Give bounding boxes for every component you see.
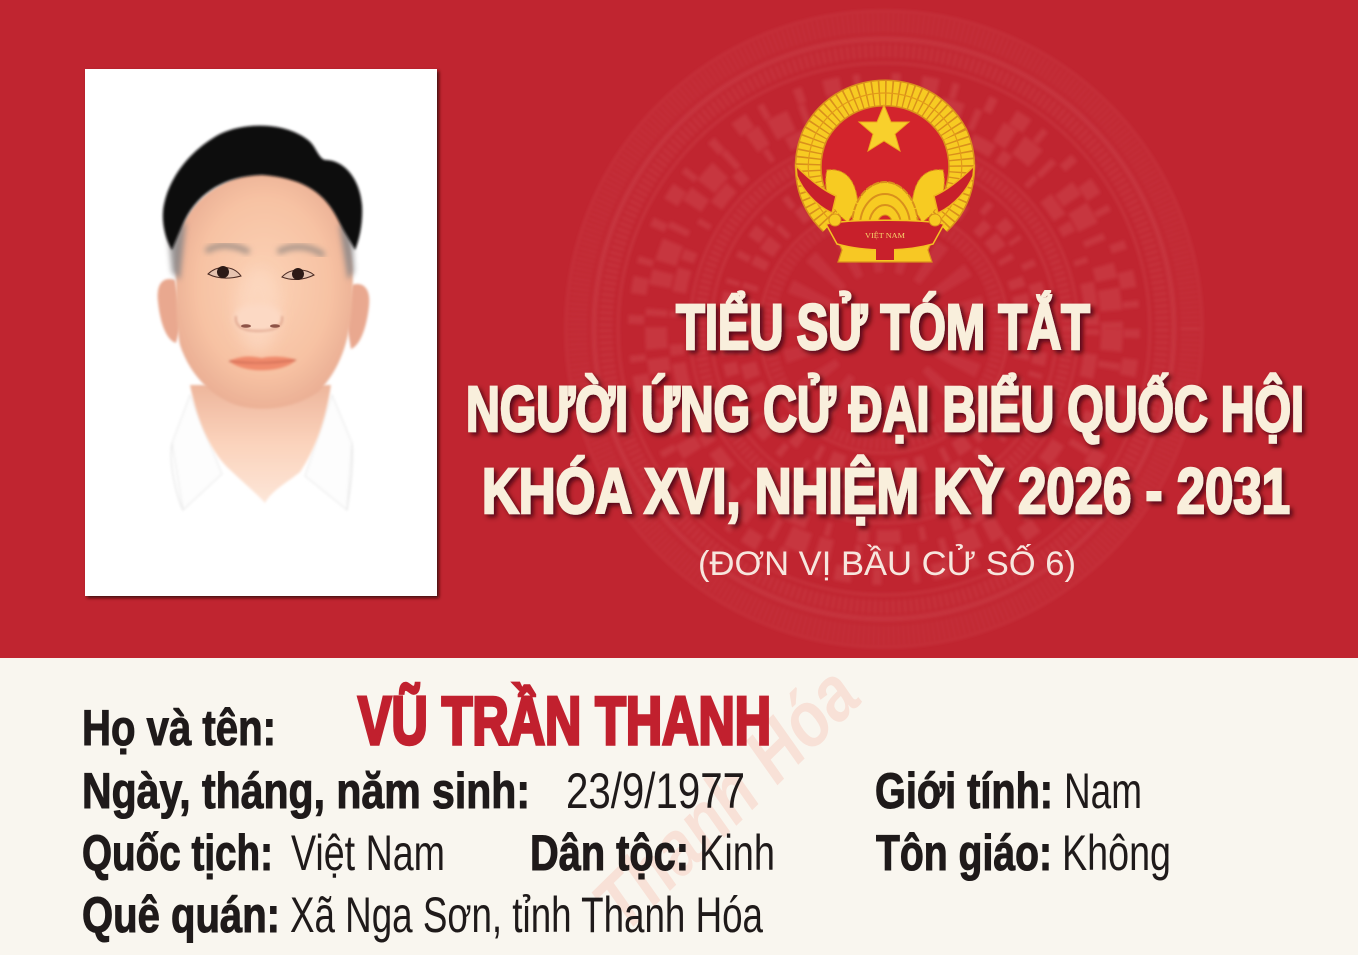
row: hometown: Xã Nga Sơn, tỉnh Thanh Hóa [290, 887, 763, 943]
row: nationality, ethnicity and religion: Quốc tịch: [82, 825, 273, 881]
row: birth date and gender: Giới tính: [875, 763, 1053, 819]
title line 1: TIỂU SỬ TÓM TẮT [676, 290, 1090, 363]
row: birth date and gender: 23/9/1977 [566, 763, 745, 819]
emblem red ribbons [796, 166, 974, 213]
emblem base columns [876, 248, 894, 260]
row: birth date and gender: Nam [1064, 763, 1142, 819]
row: hometown [82, 887, 763, 943]
row: nationality, ethnicity and religion: Không [1062, 825, 1171, 881]
row: nationality, ethnicity and religion: Việt Nam [291, 825, 445, 881]
mouth [229, 356, 296, 370]
nose [234, 304, 282, 332]
emblem banner [826, 214, 944, 250]
emblem red disc [817, 102, 953, 238]
portrait [158, 126, 369, 510]
emblem gear [852, 182, 918, 226]
row: nationality, ethnicity and religion: Dân tộc: [530, 825, 689, 881]
national emblem [796, 93, 974, 262]
temple shading [168, 222, 354, 280]
face [176, 173, 353, 409]
row: birth date and gender: Ngày, tháng, năm sinh: [82, 763, 530, 819]
emblem rice wreath [808, 93, 962, 222]
title [466, 290, 1304, 583]
hair [163, 126, 362, 250]
emblem star [859, 105, 909, 151]
row: name: VŨ TRẦN THANH [358, 682, 771, 759]
ears [158, 279, 369, 349]
watermark: Thanh Hóa [575, 650, 876, 947]
row: name: Họ và tên: [82, 700, 276, 756]
row: nationality, ethnicity and religion: Kinh [699, 825, 775, 881]
bronze drum pattern [566, 11, 1202, 647]
panel: personal details background [0, 658, 1358, 955]
brows [208, 246, 322, 254]
row: name [82, 682, 771, 759]
face highlight [236, 268, 280, 352]
row: nationality, ethnicity and religion: Tôn giáo: [876, 825, 1052, 881]
emblem rice bundles [826, 170, 944, 222]
photo frame [85, 69, 439, 598]
row: birth date and gender [82, 763, 1142, 819]
emblem banner: VIỆT NAM [865, 232, 906, 240]
shirt [171, 395, 352, 510]
row: nationality, ethnicity and religion [82, 825, 1171, 881]
subtitle: (ĐƠN VỊ BẦU CỬ SỐ 6) [698, 544, 1076, 583]
row: hometown: Quê quán: [82, 887, 280, 943]
emblem base [836, 236, 934, 262]
neck [190, 385, 331, 503]
personal details [82, 682, 1171, 943]
eyes [208, 266, 314, 280]
panel: red header background [0, 0, 1358, 658]
